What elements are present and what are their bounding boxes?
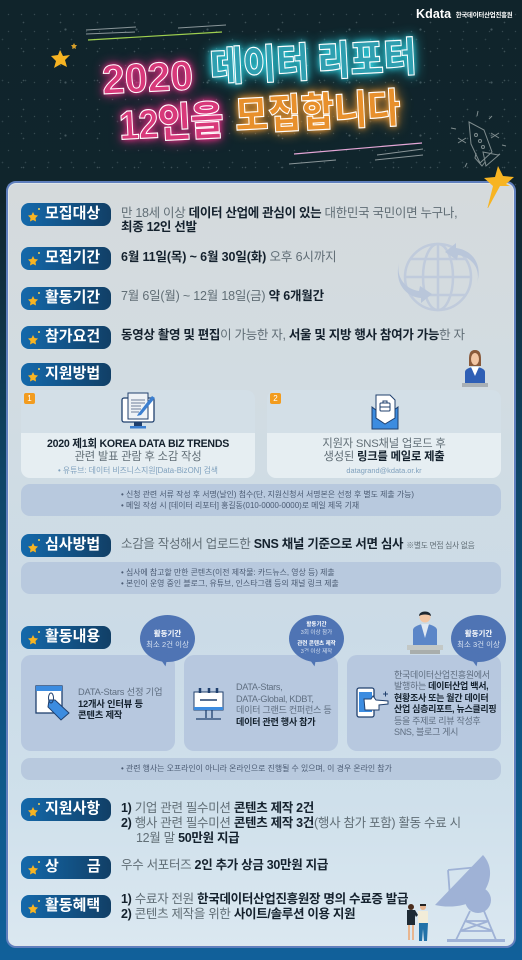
description: 6월 11일(목) ~ 6월 30일(화) 오후 6시까지	[121, 250, 336, 264]
badge 1: 1	[27, 394, 32, 403]
label pill	[21, 326, 111, 349]
activity text	[78, 687, 162, 720]
title: 모집합니다: 모집합니다	[234, 85, 402, 140]
label pill: 활동기간	[45, 289, 100, 306]
card: activity 1	[21, 655, 175, 751]
label pill: 참가요건	[45, 328, 100, 345]
icon: phone with pointing hand	[356, 687, 388, 718]
description: 7월 6일(월) ~ 12월 18일(금) 약 6개월간	[121, 289, 324, 303]
activity text	[394, 670, 496, 737]
step text: 생성된 링크를 메일로 제출	[324, 450, 444, 462]
title: 12인을: 12인을	[118, 97, 224, 149]
description	[121, 800, 461, 844]
step text	[47, 438, 229, 462]
row: 심사방법	[21, 534, 475, 557]
label pill	[21, 287, 111, 310]
callout: activity period 2: 3건 이상 제작	[301, 648, 332, 654]
email address: datagrand@kdata.or.kr	[346, 466, 422, 475]
card: step 2	[267, 390, 501, 478]
title: 데이터 리포터: 데이터 리포터	[209, 33, 418, 91]
badge 2: 2	[273, 394, 278, 403]
description: 2) 콘텐츠 제작을 위한 사이트/솔루션 이용 지원	[121, 906, 355, 920]
callout: activity period 2	[289, 615, 344, 662]
activity text: DATA-Global, KDBT,	[236, 694, 314, 704]
card: activity 3	[347, 655, 501, 751]
row: 지원사항	[21, 798, 461, 844]
activity text: 데이터 관련 행사 참가	[236, 717, 315, 727]
note: application notes	[21, 484, 501, 516]
activity text: 데이터 그랜드 컨퍼런스 등	[236, 705, 331, 715]
title	[96, 30, 424, 150]
note: online events: • 관련 행사는 오프라인이 아니라 온라인으로 진행될 수 있으며, 이 경우 온라인 참가	[121, 764, 392, 773]
label pill	[21, 534, 111, 557]
heading: 지원방법	[21, 363, 111, 386]
note: application notes: • 신청 관련 서류 작성 후 서명(날인) 첨수(단, 지원신청서 서명본은 선정 후 별도 제출 가능)	[121, 490, 414, 499]
label pill: 모집기간	[45, 249, 100, 266]
callout: activity period 3: 최소 3건 이상	[457, 640, 500, 649]
activity text: DATA-Stars,	[236, 682, 282, 692]
icon: star corner	[484, 166, 514, 208]
callout: activity period 3	[451, 615, 506, 662]
activity text: 현황조사 또는 월간 데이터	[394, 693, 488, 703]
illustration: man at podium with headset	[407, 612, 443, 654]
card: step 1	[21, 390, 255, 478]
note: online events	[21, 758, 501, 780]
label pill	[21, 203, 111, 226]
icon: woman at podium	[462, 350, 488, 387]
description: 만 18세 이상 데이터 산업에 관심이 있는 대한민국 국민이면 누구나,	[121, 206, 457, 220]
description: 1) 수료자 전원 한국데이터산업진흥원장 명의 수료증 발급	[121, 892, 408, 906]
activity text: SNS, 블로그 게시	[394, 727, 458, 737]
description: 2) 행사 관련 필수미션 콘텐츠 제작 3건(행사 참가 포함) 활동 수료 시	[121, 816, 461, 830]
activity text: 산업 심층리포트, 뉴스클리핑	[394, 704, 496, 714]
icon: globe	[398, 242, 478, 312]
label pill	[21, 798, 111, 821]
starfield background	[0, 0, 522, 190]
callout: activity period 1: 최소 2건 이상	[146, 640, 189, 649]
label pill	[21, 856, 111, 879]
callout: activity period 2: 활동기간	[306, 622, 327, 628]
label pill: 심사방법	[45, 536, 100, 553]
activity text: 콘텐츠 제작	[78, 710, 122, 720]
callout: activity period 3: 활동기간	[465, 629, 492, 638]
activity text: 등을 주제로 리뷰 작성후	[394, 716, 480, 726]
title: 2020: 2020	[101, 52, 194, 103]
note: review notes: • 심사에 참고할 만한 콘텐츠(이전 제작물: 카드뉴스, 영상 등) 제출	[121, 568, 335, 577]
illustration: satellite dish	[435, 855, 505, 942]
label pill: 활동혜택	[45, 897, 100, 914]
row: 상금	[21, 856, 328, 879]
card lower text area	[21, 433, 255, 478]
card: activity 2	[184, 655, 338, 751]
illustration: two people	[407, 904, 428, 941]
activity text: DATA-Stars 선정 기업	[78, 687, 162, 697]
icon: browser with tag	[35, 685, 70, 720]
activity text: 발행하는 데이터산업 백서,	[394, 681, 488, 691]
badge 1	[24, 393, 35, 404]
callout: activity period 1	[140, 615, 195, 662]
description: 1) 기업 관련 필수미션 콘텐츠 제작 2건	[121, 800, 314, 814]
row: 모집대상	[21, 203, 457, 234]
description	[121, 892, 408, 920]
callout: activity period 2: 3회 이상 참가	[301, 630, 332, 636]
icon: document on monitor	[121, 392, 155, 428]
card lower text area	[267, 433, 501, 478]
label pill: 상 금	[45, 858, 101, 875]
description: 소감을 작성해서 업로드한 SNS 채널 기준으로 서면 심사 ※별도 면접 심사 없음	[121, 537, 475, 551]
callout: activity period 2: 관련 콘텐츠 제작	[297, 641, 336, 647]
row: 모집기간	[21, 247, 336, 270]
description: 동영상 촬영 및 편집이 가능한 자, 서울 및 지방 행사 참여가 가능한 자	[121, 328, 465, 342]
step text	[322, 437, 446, 462]
description	[121, 206, 457, 234]
description: 최종 12인 선발	[121, 220, 197, 234]
heading: 활동내용	[21, 626, 111, 649]
row: 활동혜택	[21, 892, 408, 920]
activity text	[236, 682, 332, 727]
callout: activity period 1: 활동기간	[154, 629, 181, 638]
activity text: 12개사 인터뷰 등	[78, 699, 143, 709]
step text: 지원자 SNS채널 업로드 후	[322, 438, 446, 450]
heading: 활동내용: 활동내용	[45, 628, 100, 645]
label pill	[21, 895, 111, 918]
logo: K data: Kdata 한국데이터산업진흥원	[416, 7, 512, 21]
note: review notes	[21, 562, 501, 594]
icon: envelope	[372, 394, 398, 430]
step note: • 유튜브: 데이터 비즈니스지원[Data-BizON] 검색	[58, 466, 218, 475]
panel: main content	[6, 181, 516, 948]
label pill: 모집대상	[45, 205, 100, 222]
label pill	[21, 247, 111, 270]
step text: 관련 발표 관람 후 소감 작성	[75, 450, 201, 462]
heading: 지원방법: 지원방법	[45, 365, 100, 382]
icon: billboard	[194, 688, 224, 720]
badge 2	[270, 393, 281, 404]
label pill: 지원사항	[45, 800, 100, 817]
step text: 2020 제1회 KOREA DATA BIZ TRENDS	[47, 438, 229, 450]
note: application notes: • 메일 작성 시 [데이터 리포터] 홍길동(010-0000-0000)로 메일 제목 기재	[121, 501, 359, 510]
activity text: 한국데이터산업진흥원에서	[394, 670, 490, 680]
row: 활동기간	[21, 287, 324, 310]
description: 12월 말 50만원 지급	[136, 830, 239, 844]
row: 참가요건	[21, 326, 465, 349]
note: review notes: • 본인이 운영 중인 블로그, 유튜브, 인스타그램 등의 채널 링크 제출	[121, 579, 339, 588]
description: 우수 서포터즈 2인 추가 상금 30만원 지급	[121, 858, 328, 872]
decorative lines and stars	[51, 24, 506, 168]
